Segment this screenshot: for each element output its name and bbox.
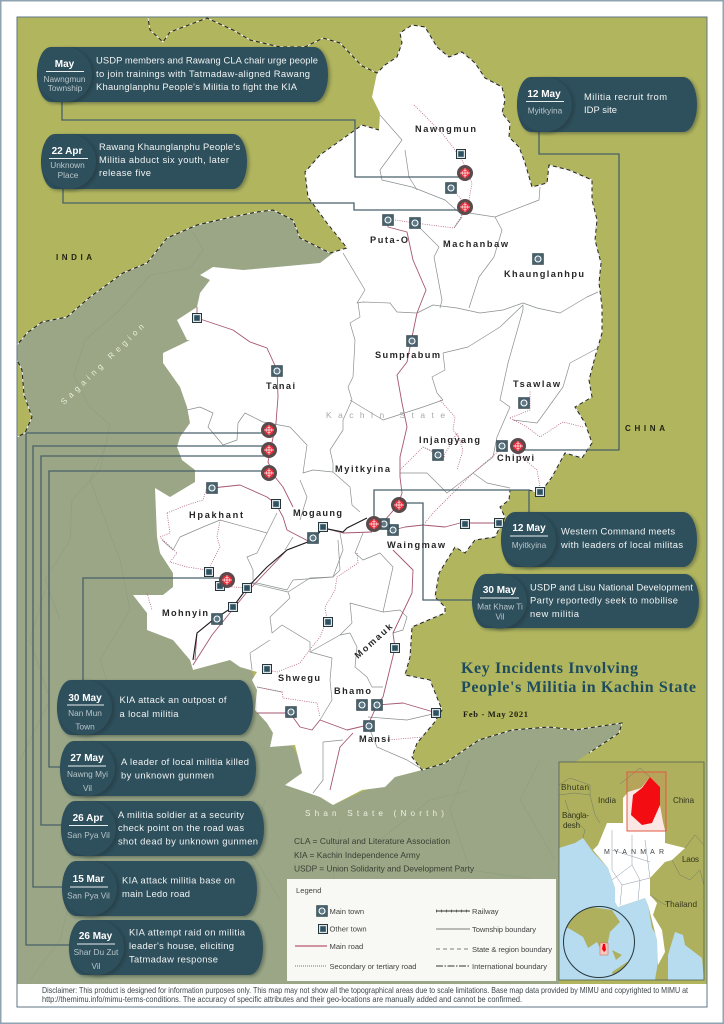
- callout: 26 Apr San Pya: [61, 801, 264, 856]
- callout: 26 May Shar Du Zut: Tatmadaw response: [129, 954, 218, 964]
- region: Sagaing and Shan State: [17, 210, 622, 984]
- inset labels: [561, 783, 699, 909]
- township labels: Khaunglanhpu: [504, 269, 584, 279]
- callout: May Nawngmun Township: Khaunglanphu People's Militia to fight the KIA: [96, 81, 298, 92]
- township labels: Tsawlaw: [513, 379, 561, 389]
- callout: 27 May Nawng Myi: A leader of local militia killed: [121, 756, 249, 767]
- callout: 30 May Nan Mun Town: [57, 680, 253, 735]
- disclaimer: http://themimu.info/mimu-terms-conditions. The accuracy of specific attributes and their geo-locations are manually added and cannot be confirmed.: [42, 995, 522, 1004]
- inset labels: Thailand: [665, 900, 697, 909]
- abbreviations: USDP = Union Solidarity and Development Party: [294, 864, 475, 874]
- callout: 12 May Myitkyina recruit: IDP site: [584, 104, 617, 115]
- title: [461, 660, 696, 696]
- township labels: Chipwi: [497, 453, 534, 463]
- township boundaries: [162, 115, 598, 793]
- callout: May Nawngmun Township: May: [55, 59, 75, 70]
- callout: 30 May Nan Mun Town: 30 May: [68, 693, 102, 704]
- callout: 26 May Shar Du Zut: [69, 920, 263, 975]
- township labels: Shwegu: [278, 673, 320, 683]
- inset labels: MYANMAR: [604, 849, 664, 856]
- township labels: Sumprabum: [375, 350, 440, 360]
- callout: May Nawngmun Township: Township: [48, 83, 83, 93]
- callout: 26 Apr San Pya: shot dead by unknown gunmen: [118, 836, 258, 846]
- callout: 27 May Nawng Myi: 27 May: [70, 753, 104, 764]
- callout: 27 May Nawng Myi: by unknown gunmen: [121, 770, 214, 780]
- inset internal boundaries: [612, 830, 650, 905]
- callout: 12 May Western Command: [501, 512, 697, 567]
- inset sea: Bay of Bengal: [559, 838, 662, 980]
- railway: [193, 518, 367, 660]
- callout: 12 May Western Command: Myitkyina: [512, 540, 547, 550]
- callout: 26 Apr San Pya: San Pya Vil: [67, 830, 110, 840]
- callout: 26 May Shar Du Zut: Vil: [91, 961, 101, 971]
- legend: Secondary or tertiary road: [330, 962, 416, 971]
- callout: 30 May Mat Khaw Ti: Party reportedly seek to mobilise: [530, 594, 678, 606]
- inset labels: Bangla-: [562, 811, 589, 820]
- township labels: Injangyang: [419, 435, 480, 445]
- callout: 30 May Mat Khaw Ti: new militia: [530, 608, 580, 619]
- callout: 22 Apr Unknown Place: 22 Apr: [52, 146, 82, 157]
- callout: 12 May Western Command: Western Command meets: [561, 526, 675, 536]
- faint background lines in neighbouring regions: [20, 232, 555, 980]
- country label: China: CHINA: [625, 424, 665, 433]
- callout: 26 Apr San Pya: 26 Apr: [73, 813, 103, 824]
- callout: 22 Apr Unknown Place: Unknown: [50, 160, 85, 170]
- callout: 30 May Nan Mun Town: KIA attack an outpost of: [120, 694, 227, 705]
- legend: Main town: [330, 907, 364, 916]
- callout: 22 Apr Unknown Place: Place: [58, 170, 79, 180]
- inset frame: [559, 762, 704, 980]
- inset neighbour boundaries: [559, 768, 704, 905]
- callout: 22 Apr Unknown Place: [41, 134, 247, 189]
- callout: 15 Mar San Pya: 15 Mar: [73, 874, 104, 885]
- inset locator map: [559, 762, 704, 982]
- inset labels: India: [598, 796, 616, 805]
- inset labels: China: [673, 796, 694, 805]
- callout: 27 May Nawng Myi: [60, 741, 256, 796]
- callout: 15 Mar San Pya: San Pya Vil: [67, 890, 110, 900]
- township labels: Momauk: [353, 621, 395, 660]
- legend: Railway: [472, 907, 499, 916]
- callout: May Nawngmun Township: [37, 47, 328, 102]
- abbreviations: CLA = Cultural and Literature Association: [294, 836, 450, 846]
- connector lines: [26, 102, 619, 945]
- callout: 30 May Mat Khaw Ti: [472, 574, 699, 628]
- callout: 12 May Western Command: with leaders of local militas: [560, 539, 683, 550]
- main roads: [193, 220, 500, 790]
- callout: 22 Apr Unknown Place: Rawang Khaunglanphu People's: [99, 141, 240, 152]
- callout: 30 May Nan Mun Town: a local militia: [120, 708, 179, 719]
- legend: [287, 879, 556, 981]
- callout: 12 May Myitkyina recruit: Militia recruit from: [584, 91, 667, 102]
- callout: 27 May Nawng Myi: Nawng Myi: [67, 769, 108, 779]
- incident markers: [219, 165, 526, 588]
- main town markers: [206, 182, 544, 732]
- abbreviations: [294, 836, 475, 874]
- township labels: Nawngmun: [415, 124, 476, 134]
- callout: 30 May Mat Khaw Ti: Vil: [495, 612, 505, 622]
- township labels: Waingmaw: [387, 540, 446, 550]
- callout: 30 May Mat Khaw Ti: USDP and Lisu National Development: [530, 582, 693, 592]
- inset sea: Gulf of Thailand: [668, 932, 704, 980]
- callout: 30 May Mat Khaw Ti: 30 May: [483, 585, 517, 596]
- callout: 27 May Nawng Myi: Vil: [83, 783, 92, 793]
- township labels: Mogaung: [293, 508, 342, 518]
- callout: May Nawngmun Township: USDP members and Rawang CLA chair urge people: [96, 54, 318, 66]
- legend: Legend: [296, 886, 321, 895]
- date range: Feb - May 2021: [463, 709, 528, 719]
- callout: 26 Apr San Pya: check point on the road was: [118, 822, 244, 833]
- callout: 30 May Nan Mun Town: Town: [75, 722, 95, 732]
- callout: 12 May Myitkyina recruit: 12 May: [527, 89, 561, 100]
- other town markers: [192, 150, 544, 718]
- township labels: Mansi: [359, 734, 390, 744]
- region label: Shan State North: Shan State (North): [305, 809, 444, 818]
- legend: Main road: [330, 942, 363, 951]
- township labels: Tanai: [266, 381, 295, 391]
- callout: 26 May Shar Du Zut: leader's house, eliciting: [129, 940, 234, 951]
- legend: Township boundary: [472, 925, 536, 934]
- callout: 26 May Shar Du Zut: 26 May: [79, 931, 113, 942]
- township labels: Myitkyina: [335, 464, 391, 474]
- legend: State & region boundary: [472, 945, 552, 954]
- township labels: [162, 124, 584, 744]
- legend: International boundary: [472, 962, 547, 971]
- inset globe: [563, 906, 635, 978]
- township labels: Machanbaw: [443, 239, 509, 249]
- state: Kachin: [133, 25, 602, 805]
- callout: 12 May Western Command: 12 May: [512, 523, 546, 534]
- abbreviations: KIA = Kachin Independence Army: [294, 850, 421, 860]
- callout: 15 Mar San Pya: main Ledo road: [122, 888, 190, 899]
- inset labels: desh: [563, 821, 580, 830]
- callout: 30 May Nan Mun Town: Nan Mun: [68, 708, 102, 718]
- callout: 22 Apr Unknown Place: release five: [99, 167, 151, 178]
- legend: Other town: [330, 924, 367, 934]
- title: People's Militia in Kachin State: [461, 679, 696, 696]
- region label: Sagaing Region: Sagaing Region: [59, 322, 146, 406]
- callout: 15 Mar San Pya: KIA attack militia base on: [122, 874, 235, 886]
- country label: India: INDIA: [56, 253, 92, 262]
- state label: Kachin State: Kachin State: [326, 410, 445, 420]
- callout: 22 Apr Unknown Place: Militia abduct six youth, later: [99, 154, 229, 165]
- callout: 12 May Myitkyina recruit: [517, 77, 697, 132]
- callout: May Nawngmun Township: to join trainings with Tatmadaw-aligned Rawang: [96, 68, 310, 79]
- township labels: Bhamo: [334, 686, 371, 696]
- inset extent box: [627, 772, 666, 831]
- callout: 15 Mar San Pya: [62, 861, 257, 916]
- callout: 26 Apr San Pya: A militia soldier at a security: [118, 809, 244, 820]
- inset Myanmar: [593, 777, 685, 965]
- township labels: Puta-O: [370, 235, 408, 245]
- callout: 26 May Shar Du Zut: Shar Du Zut: [74, 947, 119, 957]
- secondary roads: [147, 105, 583, 740]
- inset labels: Bhutan: [561, 783, 589, 792]
- callout: May Nawngmun Township: Nawngmun: [44, 74, 86, 84]
- title: Key Incidents Involving: [461, 660, 638, 677]
- disclaimer: [17, 984, 707, 1007]
- township labels: Mohnyin: [162, 608, 208, 618]
- inset labels: Laos: [682, 855, 699, 864]
- international boundaries: [17, 18, 622, 770]
- callout: 26 May Shar Du Zut: KIA attempt raid on militia: [129, 926, 246, 938]
- callout: 30 May Mat Khaw Ti: Mat Khaw Ti: [477, 602, 523, 612]
- township labels: Hpakhant: [189, 510, 243, 520]
- callout: 12 May Myitkyina recruit: Myitkyina: [528, 106, 563, 116]
- inset Kachin State in red: [631, 777, 660, 825]
